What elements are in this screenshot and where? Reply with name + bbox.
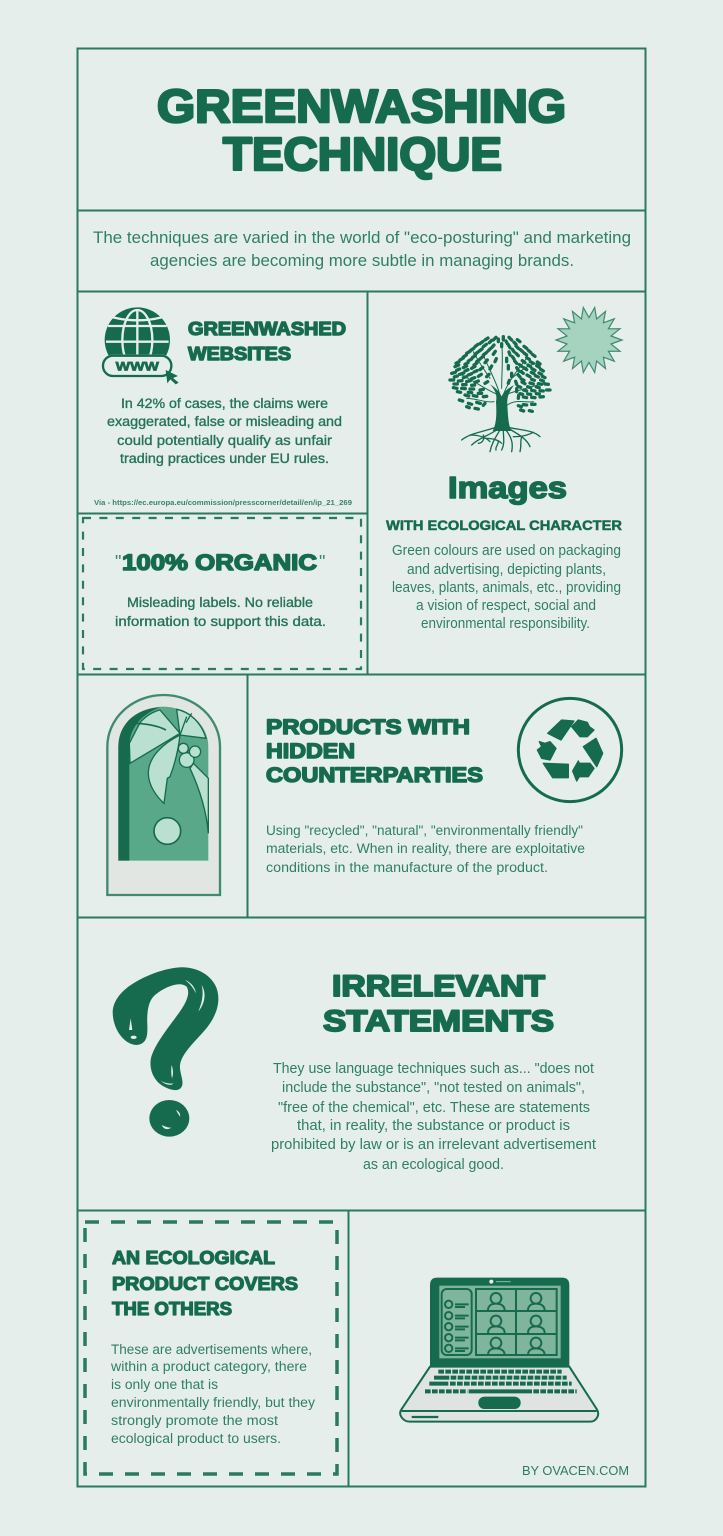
heading: an ecological product: AN ECOLOGICAL: [112, 1248, 275, 1268]
text: advertisements: ecological product to users.: [111, 1431, 281, 1446]
icon: palm tree arch: [107, 695, 220, 895]
heading: products with hidden counterparties: HIDDEN: [266, 740, 355, 763]
text: green colours: environmental responsibility.: [421, 616, 590, 632]
icon: recycling symbol: [518, 698, 622, 802]
text: advertisements: These are advertisements where,: [111, 1342, 312, 1357]
text: language techniques: [271, 1061, 596, 1173]
panel: an ecological product covers the others: [85, 1222, 337, 1474]
intro text: agencies are becoming more subtle in managing brands.: [150, 251, 574, 270]
title: GREENWASHING: [157, 80, 566, 132]
text: green colours: and advertising, depicting plants,: [407, 562, 606, 578]
dashed border: [85, 1222, 337, 1474]
text: 42% of cases: [107, 396, 342, 466]
text: advertisements: [110, 1342, 315, 1446]
text: recycled materials: materials, etc. When in reality, there are exploitative: [266, 841, 585, 856]
heading: an ecological product: [112, 1248, 298, 1319]
intro text: The techniques are varied in the world of "eco-posturing" and marketing: [93, 228, 631, 247]
text: green colours: a vision of respect, social and: [416, 598, 596, 614]
intro text: [93, 228, 631, 270]
text: language techniques: "free of the chemical", etc. These are statements: [278, 1100, 590, 1116]
text: advertisements: environmentally friendly, but they: [111, 1395, 315, 1410]
icon: spiky sun: [556, 308, 622, 372]
heading: 100% organic: ": [115, 552, 121, 572]
text: advertisements: is only one that is: [111, 1377, 218, 1392]
text: green colours: leaves, plants, animals, etc., providing: [392, 580, 621, 596]
icon: laptop video call: [400, 1278, 598, 1422]
source link text: Via - https://ec.europa.eu/commission/presscorner/detail/en/ip_21_269: [94, 500, 352, 507]
credit: by ovacen.com: BY OVACEN.COM: [522, 1463, 629, 1478]
text: recycled materials: conditions in the manufacture of the product.: [266, 860, 548, 875]
heading: greenwashed websites: GREENWASHED: [188, 319, 346, 339]
title: TECHNIQUE: [223, 128, 502, 180]
text: misleading labels: information to support this data.: [115, 614, 326, 629]
subheading: with ecological character: WITH ECOLOGICAL CHARACTER: [386, 518, 622, 533]
text: advertisements: strongly promote the most: [111, 1413, 278, 1428]
panel: products with hidden counterparties: [107, 695, 622, 895]
icon: www globe: [102, 307, 179, 384]
heading: 100% organic: 100% ORGANIC: [122, 550, 317, 575]
outer frame and panel dividers: [77, 48, 646, 1487]
text: language techniques: include the substance", "not tested on animals",: [282, 1080, 585, 1096]
text: misleading labels: [115, 595, 326, 629]
panel: irrelevant statements: [113, 967, 596, 1173]
heading: 100% organic: ": [319, 552, 325, 572]
text: green colours: [392, 543, 621, 632]
heading: an ecological product: THE OTHERS: [112, 1299, 232, 1319]
title: [157, 80, 566, 180]
text: 42% of cases: could potentially qualify as unfair: [117, 433, 333, 448]
text: 42% of cases: exaggerated, false or misleading and: [107, 414, 342, 429]
heading: irrelevant statements: STATEMENTS: [323, 1005, 554, 1038]
text: language techniques: prohibited by law or is an irrelevant advertisement: [271, 1137, 596, 1153]
text: recycled materials: [266, 823, 585, 875]
text: advertisements: within a product category, there: [110, 1359, 307, 1374]
heading: an ecological product: PRODUCT COVERS: [112, 1274, 298, 1294]
text: misleading labels: Misleading labels. No reliable: [127, 595, 313, 610]
icon: question mark: [113, 967, 218, 1137]
text: language techniques: They use language techniques such as... "does not: [273, 1061, 594, 1077]
icon: www globe: WWW: [116, 359, 160, 373]
dashed border: [83, 518, 361, 669]
panel: greenwashed websites: [94, 307, 352, 507]
heading: irrelevant statements: IRRELEVANT: [332, 970, 545, 1003]
text: recycled materials: Using "recycled", "natural", "environmentally friendly": [266, 823, 583, 838]
text: 42% of cases: In 42% of cases, the claims were: [121, 396, 328, 411]
heading: images: Images: [448, 470, 567, 505]
icon: tree with roots: [450, 337, 550, 452]
heading: products with hidden counterparties: COUNTERPARTIES: [266, 764, 483, 787]
heading: irrelevant statements: [323, 970, 554, 1038]
text: green colours: Green colours are used on packaging: [392, 543, 621, 559]
heading: products with hidden counterparties: [266, 716, 483, 787]
text: language techniques: as an ecological good.: [363, 1157, 504, 1173]
panel: images: [386, 308, 622, 632]
heading: products with hidden counterparties: PRODUCTS WITH: [266, 716, 470, 739]
panel: 100% organic: [83, 518, 361, 669]
text: 42% of cases: trading practices under EU rules.: [120, 451, 329, 466]
text: language techniques: that, in reality, the substance or product is: [297, 1118, 570, 1134]
heading: greenwashed websites: WEBSITES: [188, 344, 291, 364]
heading: greenwashed websites: [188, 319, 346, 364]
